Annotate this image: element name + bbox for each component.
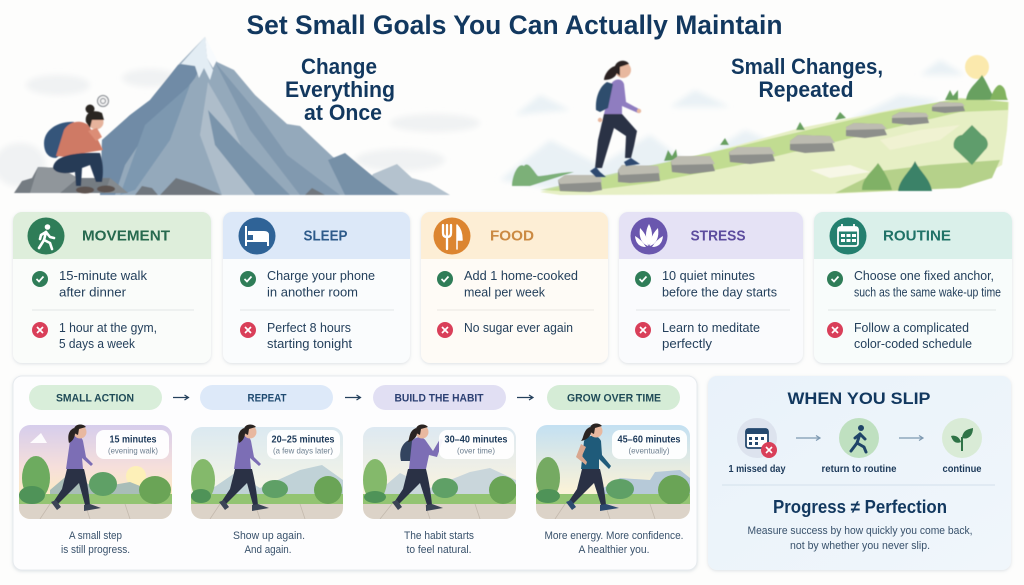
arrow [517, 395, 533, 400]
don't: food [437, 321, 573, 338]
time label: 45-60 minutes: (eventually) [628, 446, 670, 456]
don't: routine: color-coded schedule [854, 337, 972, 351]
caption: show up again: Show up again. [233, 530, 305, 542]
do: movement [32, 269, 148, 300]
panel: movement [13, 212, 211, 363]
panel: food [421, 212, 608, 363]
heading: when you slip: WHEN YOU SLIP [788, 389, 930, 408]
don't: movement: 1 hour at the gym, [59, 321, 157, 335]
do: sleep [240, 269, 375, 300]
do: stress: before the day starts [662, 286, 777, 300]
do: stress [635, 269, 777, 300]
text: measure success: Measure success by how quickly you come back, [748, 525, 972, 537]
caption: show up again: And again. [244, 544, 292, 556]
step pill: small action: SMALL ACTION [56, 392, 134, 404]
don't: sleep: starting tonight [267, 337, 353, 351]
don't: movement: 5 days a week [59, 337, 136, 351]
time label: 30-40 minutes: 30–40 minutes [444, 434, 508, 446]
time label: 30-40 minutes [439, 430, 514, 459]
do: food [437, 269, 578, 300]
icon: fork and knife [434, 218, 470, 254]
label: 1 missed day: 1 missed day [728, 464, 786, 475]
step pill: small action [29, 385, 162, 410]
panel: stress [619, 212, 803, 363]
arrow [899, 436, 923, 440]
do: sleep: Charge your phone [267, 269, 375, 283]
panel: routine [814, 212, 1012, 363]
label: continue: continue [942, 464, 982, 475]
stepping stones [558, 102, 965, 192]
caption: more energy: A healthier you. [578, 544, 650, 556]
caption: more energy: More energy. More confidence. [544, 530, 684, 542]
illustration: overwhelming mountain [0, 37, 480, 195]
don't: stress: perfectly [662, 337, 713, 351]
do: movement: after dinner [59, 286, 126, 300]
heading: small changes, repeated: Small Changes, [731, 54, 883, 79]
time label: 20-25 minutes: 20–25 minutes [272, 434, 335, 446]
time label: 15 minutes: 15 minutes [110, 434, 157, 446]
time label: 15 minutes: (evening walk) [108, 446, 158, 456]
caption: small step: is still progress. [61, 544, 130, 556]
icon: sprout [942, 418, 982, 458]
scene: 20-25 minute walk [191, 427, 343, 519]
illustration: hillside with stepping stones [500, 55, 1009, 195]
heading: food: FOOD [490, 228, 534, 244]
scene: 45-60 minute walk [536, 425, 690, 519]
heading: small changes, repeated: Repeated [758, 77, 854, 102]
caption: habit starts: to feel natural. [406, 544, 472, 556]
do: sleep: in another room [267, 286, 358, 300]
do: food: meal per week [464, 286, 546, 300]
icon: return to routine [839, 418, 879, 458]
arrow [173, 395, 188, 400]
scene: 15 minute evening walk [19, 425, 172, 519]
don't: food: No sugar ever again [464, 321, 573, 335]
figure: walker with backpack [392, 425, 443, 511]
text: measure success [748, 525, 972, 552]
icon: lotus [630, 218, 668, 254]
caption: habit starts: The habit starts [404, 530, 474, 542]
figure: walker in purple hoodie [51, 425, 101, 511]
icon: bed [238, 218, 276, 254]
do: movement: 15-minute walk [59, 269, 148, 283]
do: routine: Choose one fixed anchor, [854, 269, 994, 283]
time label: 20-25 minutes: (a few days later) [273, 446, 333, 456]
don't: stress: Learn to meditate [662, 321, 760, 335]
caption: habit starts [404, 530, 474, 556]
figure: walker in purple hoodie [219, 425, 269, 511]
don't: sleep [240, 321, 353, 351]
icon: missed day calendar [737, 418, 777, 458]
step pill: repeat [200, 385, 333, 410]
heading: progress is not perfection: Progress ≠ Perfection [773, 497, 947, 517]
do: food: Add 1 home-cooked [464, 269, 578, 283]
don't: routine [827, 321, 972, 351]
scene: 30-40 minute walk [363, 427, 517, 519]
icon: calendar [830, 218, 866, 254]
figure: confident walker in teal shirt [566, 424, 619, 511]
title: Set Small Goals You Can Actually Maintain [246, 10, 782, 40]
heading: change everything at once: at Once [304, 100, 382, 125]
arrow [345, 395, 360, 400]
illustration: hiker climbing the steps [590, 61, 641, 177]
time label: 15 minutes [96, 430, 169, 459]
label: return to routine: return to routine [822, 464, 897, 475]
heading: small changes, repeated [731, 54, 883, 102]
step pill: grow over time: GROW OVER TIME [567, 392, 661, 404]
caption: small step [61, 530, 130, 556]
don't: sleep: Perfect 8 hours [267, 321, 351, 335]
panel: sleep [223, 212, 410, 363]
panel: when you slip [708, 376, 1011, 570]
caption: small step: A small step [69, 530, 122, 542]
heading: change everything at once [285, 54, 395, 125]
heading: change everything at once: Change [301, 54, 377, 79]
caption: show up again [233, 530, 305, 556]
arrow [796, 436, 820, 440]
text: measure success: not by whether you never slip. [790, 540, 930, 552]
heading: routine: ROUTINE [883, 228, 951, 244]
illustration: overwhelmed hiker seated on rock [14, 96, 128, 194]
time label: 45-60 minutes [612, 430, 687, 459]
step pill: build the habit [373, 385, 506, 410]
panel: habit progression [13, 376, 697, 570]
heading: change everything at once: Everything [285, 77, 395, 102]
step pill: repeat: REPEAT [248, 392, 287, 404]
heading: sleep: SLEEP [304, 228, 348, 244]
do: routine [827, 269, 1001, 300]
don't: stress [635, 321, 760, 351]
don't: routine: Follow a complicated [854, 321, 969, 335]
icon: walking person [28, 218, 64, 254]
step pill: build the habit: BUILD THE HABIT [394, 392, 484, 404]
caption: more energy [544, 530, 684, 556]
heading: movement: MOVEMENT [82, 228, 170, 244]
do: stress: 10 quiet minutes [662, 269, 755, 283]
time label: 30-40 minutes: (over time) [457, 446, 495, 456]
don't: movement [32, 321, 157, 351]
heading: stress: STRESS [690, 228, 746, 244]
step pill: grow over time [547, 385, 680, 410]
time label: 45-60 minutes: 45–60 minutes [618, 434, 681, 446]
time label: 20-25 minutes [267, 430, 340, 459]
